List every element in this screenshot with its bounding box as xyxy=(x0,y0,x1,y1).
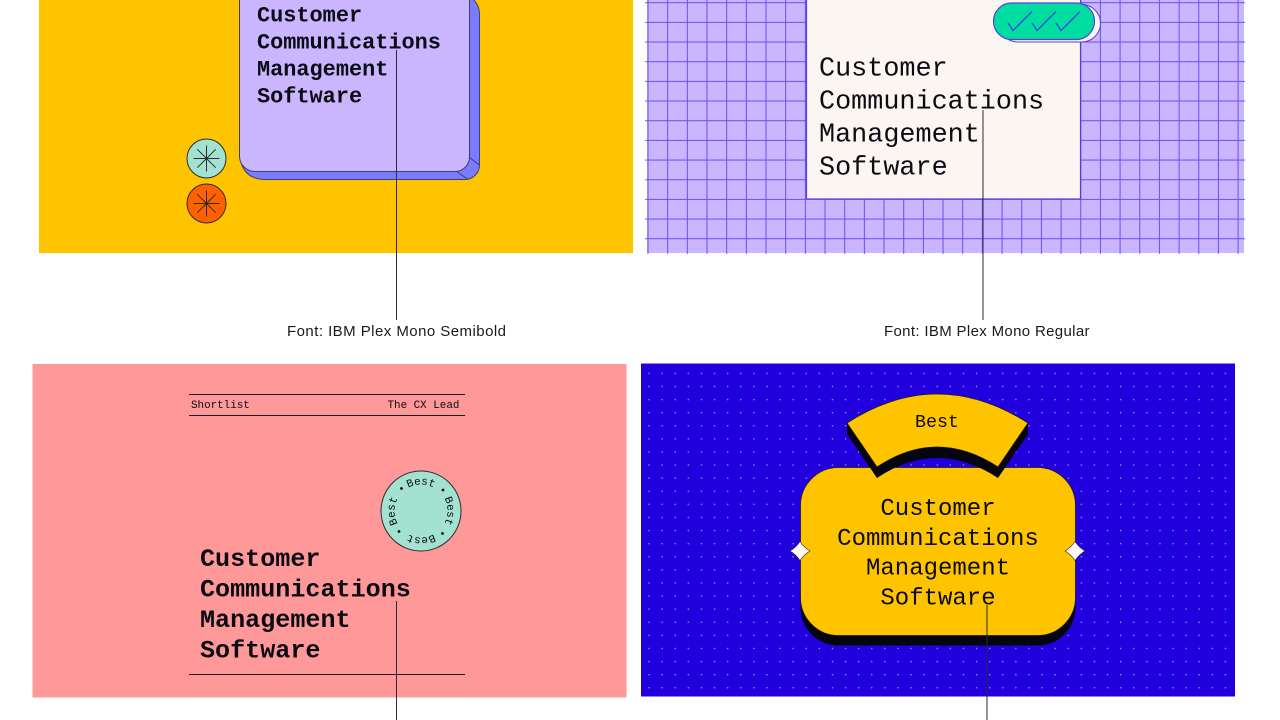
heading: regular text: Management xyxy=(819,120,980,150)
icon: right diamond xyxy=(1065,542,1085,560)
badge: circular Best stamp: Best xyxy=(406,478,435,488)
heading: semibold text: Customer xyxy=(257,4,362,28)
badge: circular Best stamp: Best xyxy=(407,534,436,544)
connector: blue panel line xyxy=(986,605,988,720)
heading: semibold text: Software xyxy=(257,84,362,110)
card: yellow rounded box xyxy=(800,468,1076,646)
badge: arc Best banner: Best xyxy=(915,413,959,433)
header rules and labels: The CX Lead xyxy=(388,400,459,412)
icon: orange asterisk badge xyxy=(187,184,226,223)
connector: semibold caption line xyxy=(396,50,398,320)
heading: medium text: Customer xyxy=(200,545,320,574)
icon: left diamond xyxy=(790,542,810,560)
badge: circular Best stamp xyxy=(380,470,462,552)
badge: circular Best stamp: Best xyxy=(444,496,454,525)
heading: centred text: Customer xyxy=(880,496,996,523)
caption: semibold: Font: IBM Plex Mono Semibold xyxy=(287,323,506,340)
badge: circular Best stamp: Best xyxy=(388,497,398,526)
heading: medium text: Communications xyxy=(200,576,411,604)
icon: green check pill xyxy=(994,3,1100,42)
heading: regular text: Software xyxy=(819,154,948,184)
heading: regular text: Communications xyxy=(819,88,1044,118)
heading: medium text: Management xyxy=(200,606,351,635)
panel: regular sample on grid xyxy=(645,0,1245,254)
header rules and labels xyxy=(189,394,465,416)
card: cream box xyxy=(806,0,1080,199)
heading: centred text: Software xyxy=(880,586,996,612)
panel: semibold sample on yellow xyxy=(39,0,633,253)
heading: semibold text: Communications xyxy=(257,30,441,56)
badge: arc Best banner xyxy=(847,394,1028,478)
heading: semibold text: Management xyxy=(257,58,388,82)
heading: centred text: Communications xyxy=(837,526,1039,553)
connector: pink panel line xyxy=(396,601,398,720)
heading: regular text: Customer xyxy=(819,54,948,84)
card: purple 3D box xyxy=(240,0,480,180)
panel: pink editorial sample xyxy=(32,364,626,698)
heading: centred text: Management xyxy=(866,556,1010,582)
connector: regular caption line xyxy=(982,110,984,320)
caption: regular: Font: IBM Plex Mono Regular xyxy=(884,323,1090,340)
heading: medium text: Software xyxy=(200,636,320,666)
header rules and labels: Shortlist xyxy=(191,400,250,412)
panel: blue dotted sample xyxy=(641,364,1235,696)
icon: teal asterisk badge xyxy=(187,139,226,178)
